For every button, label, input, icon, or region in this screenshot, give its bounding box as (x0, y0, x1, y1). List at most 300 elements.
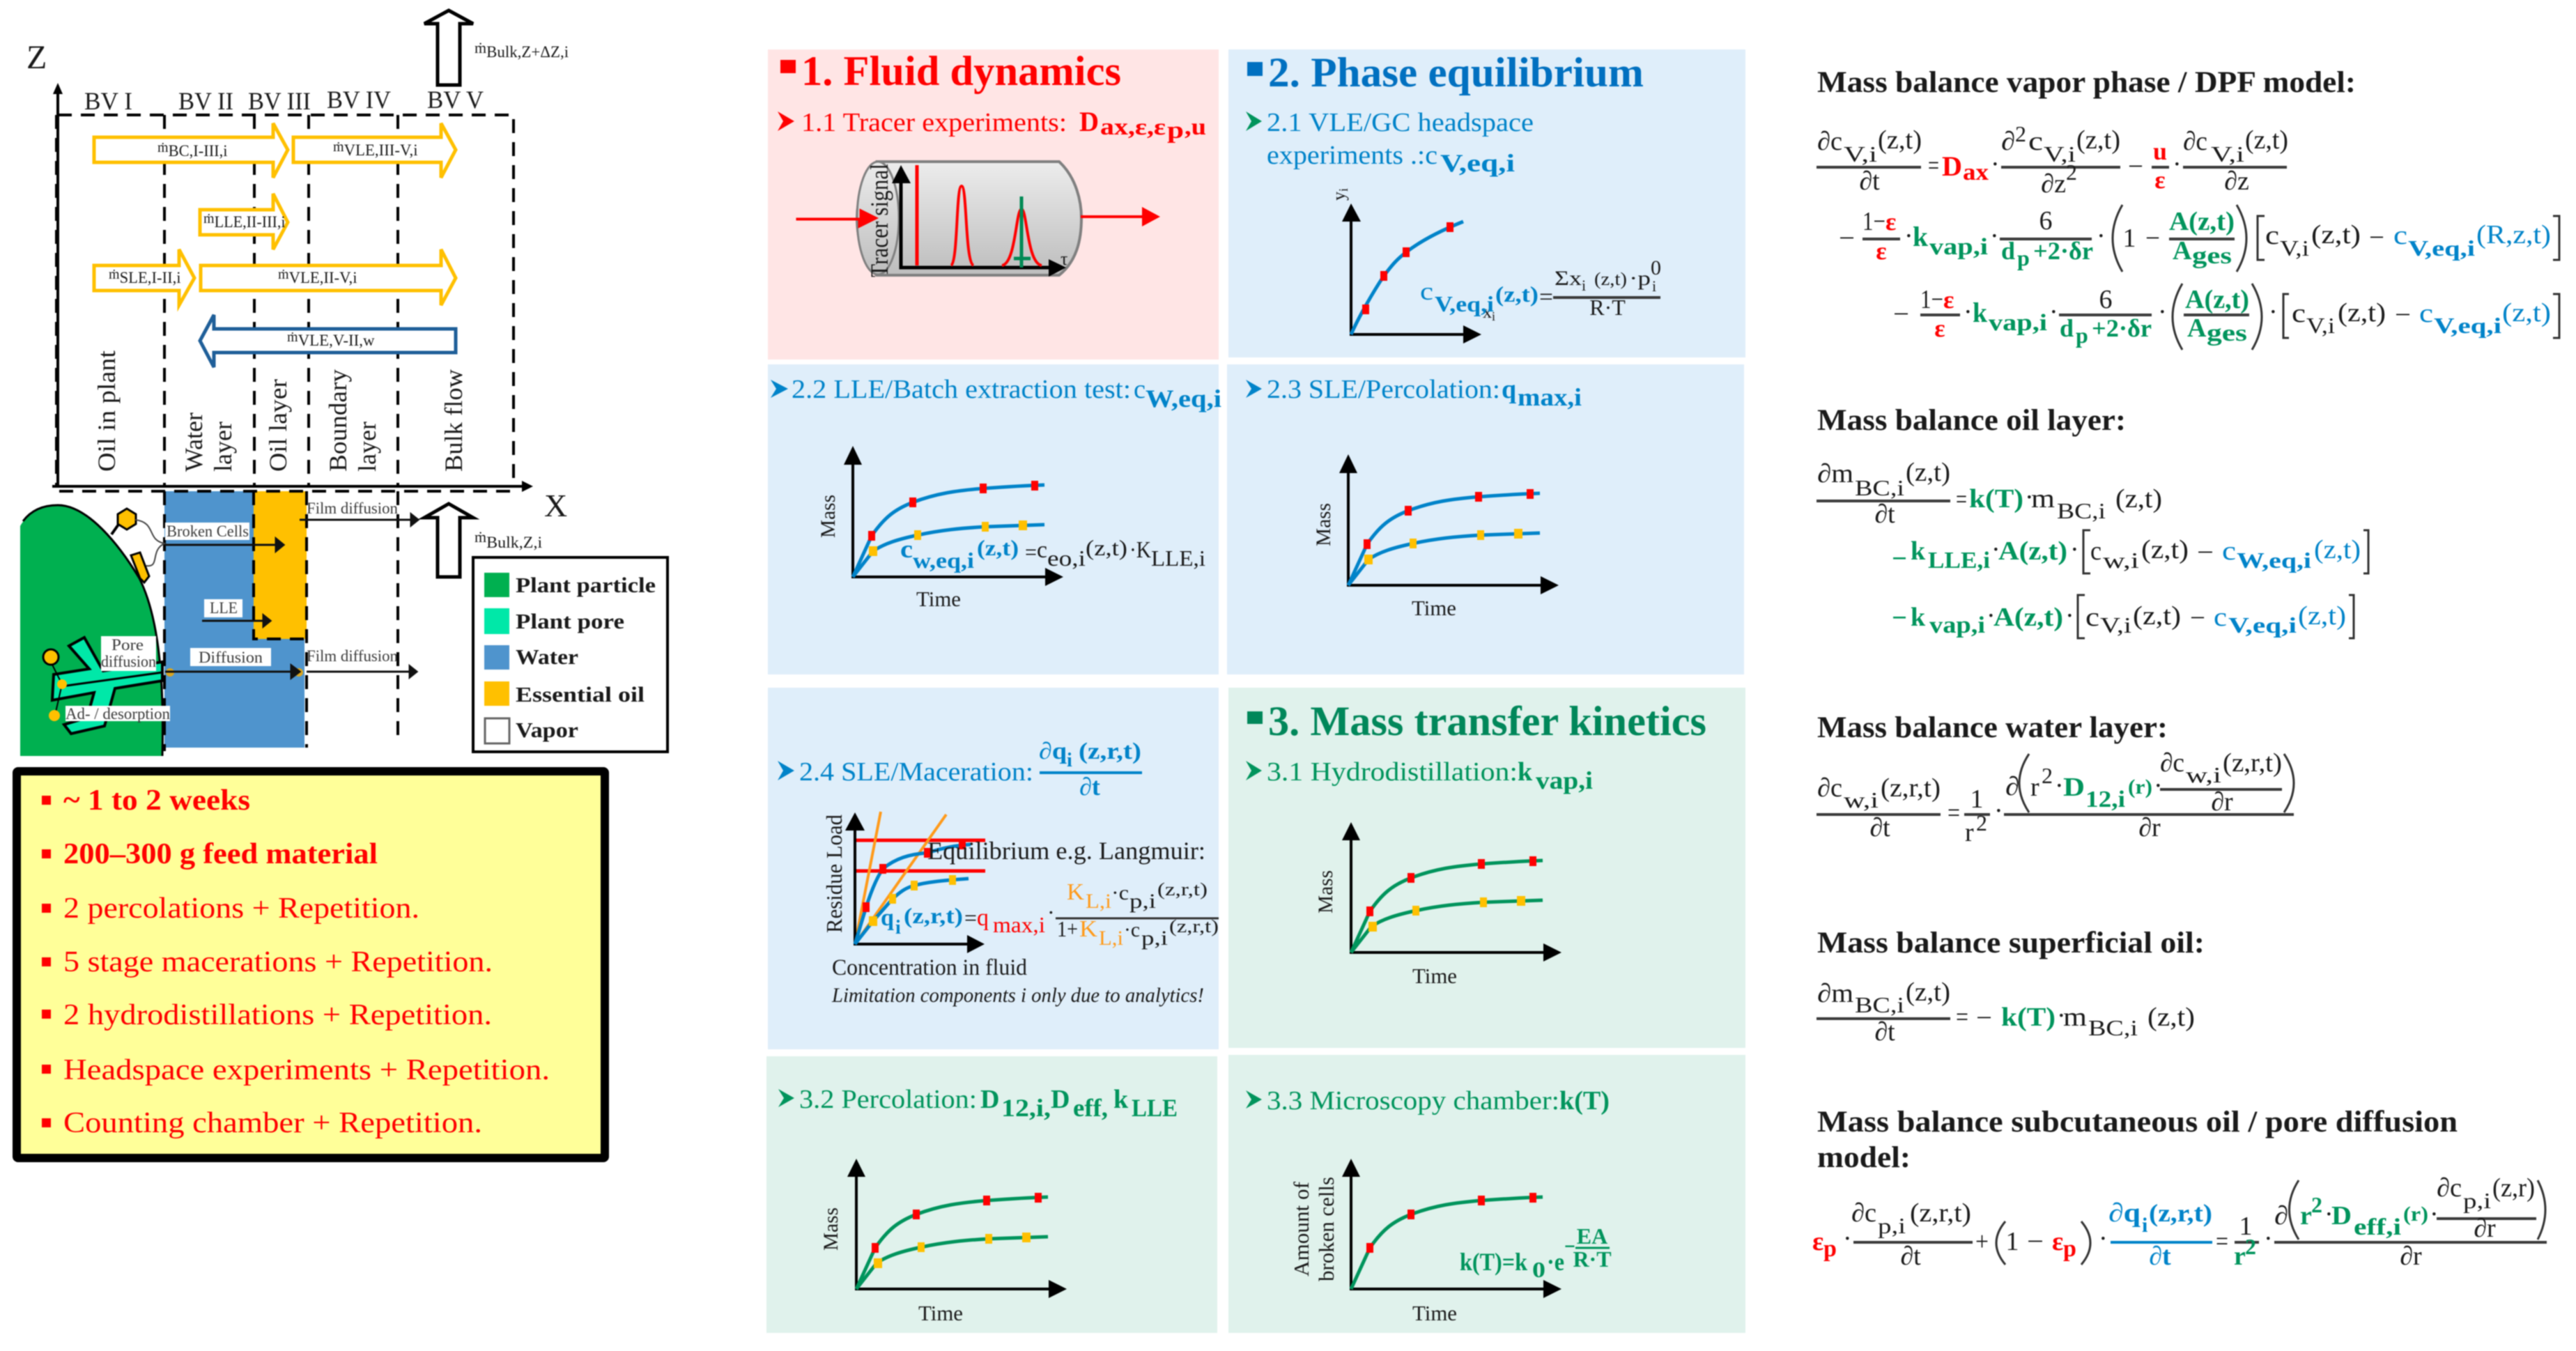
equation: water layer: r (2030, 773, 2039, 802)
chart: residue load isotherm: Residue Load (822, 815, 847, 933)
heading: mass balance superficial oil: Mass balance superficial oil: (1817, 927, 2205, 959)
list items: Counting chamber + Repetition. (63, 1107, 482, 1139)
equation: water layer: w,i (1844, 787, 1879, 812)
equation: oil layer: · (1987, 601, 1996, 631)
equation: subcutaneous oil pore diffusion (1812, 1173, 2547, 1271)
equation: subcutaneous oil pore diffusion: ∂t (2149, 1242, 2171, 1271)
equation: oil layer: (z,t) (2141, 535, 2189, 564)
subheading: SLE percolation: max,i (1518, 383, 1582, 411)
equation: subcutaneous oil pore diffusion: p,i (2463, 1188, 2491, 1213)
equation: vapor phase line 1: D (1942, 150, 1962, 182)
equation: vapor phase line 2: − (2369, 223, 2384, 252)
chart: broken cells over time: broken cells (1314, 1177, 1339, 1281)
formula: vapor equilibrium: V,eq,i (1435, 291, 1494, 316)
equation: superficial oil: BC,i (2088, 1015, 2138, 1040)
formula: vapor equilibrium: (z,t) (1495, 281, 1538, 307)
equation: vapor phase line 2: (z,t) (2311, 220, 2361, 249)
equation: vapor phase line 3: − (2395, 300, 2411, 330)
equation: oil layer: vap,i (1929, 612, 1985, 638)
arrow: tracer inlet (796, 209, 878, 228)
formula: Langmuir isotherm: p,i (1129, 890, 1156, 913)
formula: LLE equilibrium: eo,i (1047, 546, 1086, 571)
formula: Langmuir isotherm: q (977, 905, 989, 931)
equation: oil layer: c (2085, 603, 2099, 632)
subheading: VLE headspace: V,eq,i (1440, 149, 1515, 177)
equation: water layer: 2 (1976, 810, 1987, 835)
equation: subcutaneous oil pore diffusion: p (2063, 1236, 2076, 1262)
equation: superficial oil: (z,t) (2147, 1003, 2195, 1032)
equation: vapor phase line 3: · (1964, 298, 1973, 327)
formula: vapor equilibrium: 0 (1651, 256, 1661, 279)
formula: Langmuir isotherm: L,i (1086, 890, 1111, 913)
panel: 3.2 percolation (766, 1056, 1217, 1333)
formula: LLE equilibrium (900, 535, 1205, 573)
equation: superficial oil: k(T) (2001, 1003, 2056, 1032)
chart: mass over time green: Mass (1314, 870, 1337, 913)
legend: plant pore: Plant pore (516, 609, 624, 633)
arrow: bulk flow out (424, 10, 473, 85)
equation: oil layer: c (2222, 536, 2236, 566)
chart: broken cells over time: Amount of (1289, 1181, 1313, 1276)
equation: water layer: D (2063, 773, 2085, 802)
balance volume headings: BV I (84, 87, 132, 115)
equation: oil layer: (z,t) (2133, 601, 2181, 631)
equation: oil layer: − (2190, 603, 2205, 633)
equation: vapor phase line 3: · (2049, 298, 2058, 327)
equation: subcutaneous oil pore diffusion: ∂ (2274, 1201, 2288, 1230)
arrow: LLE flux: ṁ (203, 211, 215, 226)
equation: vapor phase line 2: k (1913, 221, 1929, 252)
layer boundaries (59, 491, 514, 751)
formula: Langmuir isotherm: K (1067, 879, 1084, 905)
equation: subcutaneous oil pore diffusion: ∂r (2474, 1214, 2496, 1243)
list items: 2 hydrodistillations + Repetition. (63, 999, 492, 1031)
equation: oil layer: (z,t) (1906, 458, 1950, 487)
formula: Langmuir isotherm: (z,r,t) (1157, 879, 1208, 900)
equation: vapor phase line 3: A (2187, 314, 2207, 343)
equation: subcutaneous oil pore diffusion: + (1975, 1227, 1989, 1256)
subheading: tracer experiments: D (1079, 106, 1099, 137)
equation: superficial oil: BC,i (1855, 992, 1904, 1017)
equation: vapor phase line 3: · (2158, 298, 2167, 327)
formula: LLE equilibrium: (z,t) (977, 535, 1019, 560)
label: bulk flow in: Bulk,Z,i (486, 534, 542, 551)
legend: vapor: Vapor (516, 718, 578, 742)
heading: fluid dynamics: 1. Fluid dynamics (801, 48, 1121, 94)
chart: mass over time blue: Mass (817, 495, 840, 538)
arrow: LLE flux (200, 194, 288, 249)
subheading: hydrodistillation (1246, 757, 1593, 794)
label: LLE: LLE (210, 599, 238, 617)
water layer (164, 491, 304, 748)
arrow: water vapor flux (200, 315, 456, 367)
list items: ~ 1 to 2 weeks (63, 785, 250, 817)
subheading: SLE maceration: (z,r,t) (1079, 739, 1141, 764)
equation: superficial oil: = (1956, 1003, 1968, 1032)
equation: vapor phase line 3: 6 (2099, 285, 2113, 314)
equation: oil layer: · (2070, 535, 2079, 564)
formula: vapor equilibrium: c (1420, 277, 1433, 305)
equation: subcutaneous oil pore diffusion: p,i (1878, 1213, 1906, 1238)
equation: vapor phase line 1: ∂c (1817, 127, 1842, 156)
label: bulk flow out: Bulk,Z+ΔZ,i (486, 43, 569, 61)
formula: Langmuir isotherm: ·c (1124, 918, 1140, 941)
equation: subcutaneous oil pore diffusion: ∂c (1851, 1198, 1876, 1228)
equation: oil layer: − (2197, 538, 2214, 567)
heading: phase equilibrium: 2. Phase equilibrium (1268, 49, 1644, 95)
equation: vapor phase line 1 (1817, 121, 2288, 199)
equation: subcutaneous oil pore diffusion: ε (2052, 1227, 2063, 1256)
formula: vapor equilibrium: = (1539, 284, 1553, 310)
chart: broken cells over time (1289, 1159, 1561, 1325)
panel: experimental effort summary (17, 771, 605, 1158)
equation: vapor phase line 2: 1− (1862, 207, 1885, 236)
balance volume grid (56, 115, 514, 486)
superficial oil droplets (111, 509, 164, 582)
equation: vapor phase line 2: ges (2192, 243, 2232, 269)
icon: tracer column chart: Tracer signal (865, 164, 893, 277)
arrow: superficial oil flux: ṁ (157, 140, 169, 155)
equation: vapor phase line 1: ax (1963, 160, 1989, 185)
equation: subcutaneous oil pore diffusion: · (2099, 1224, 2108, 1253)
heading: mass balance oil layer: Mass balance oil layer: (1817, 404, 2126, 437)
arrow: water vapor flux: VLE,V-II,w (298, 332, 375, 349)
equation: oil layer: k (1911, 536, 1926, 566)
equation: oil layer: · (2065, 601, 2074, 631)
vertical region labels: Boundary (324, 369, 352, 472)
panel: 3.3 microscopy chamber (1228, 1055, 1745, 1333)
legend: plant pore (484, 608, 624, 634)
subheading: LLE batch extraction (771, 375, 1221, 412)
equation: vapor phase line 3 (1893, 284, 2559, 350)
equation: vapor phase line 1: ∂c (2183, 127, 2207, 156)
equation: subcutaneous oil pore diffusion: (z,r) (2492, 1173, 2535, 1203)
equation: water layer: 2 (2042, 763, 2053, 788)
balance volume headings (84, 86, 484, 115)
equation: water layer: (z,r,t) (1881, 773, 1941, 803)
panel: 2.4 SLE maceration (768, 688, 1219, 1049)
equation: subcutaneous oil pore diffusion: 2 (2245, 1234, 2256, 1259)
equation: vapor phase line 3: (z,t) (2338, 298, 2386, 327)
equation: vapor phase line 1: ∂z (2041, 169, 2066, 199)
equation: water layer: ∂t (1869, 813, 1890, 842)
subheading: VLE headspace (1246, 108, 1534, 177)
panel: 3 mass transfer kinetics (1228, 688, 1745, 1048)
plant particle outline (23, 505, 162, 756)
equation: vapor phase line 3: V,eq,i (2434, 313, 2501, 338)
equation: vapor phase line 3: ε (1943, 286, 1954, 314)
equation: vapor phase line 3: c (2419, 299, 2433, 328)
equation: vapor phase line 2: d (2001, 237, 2015, 265)
equation: superficial oil (1817, 978, 2195, 1047)
subheading: percolation: D (1051, 1085, 1070, 1114)
equation: vapor phase line 1: V,i (2211, 141, 2244, 167)
equation: oil layer: k(T) (1969, 484, 2023, 514)
subheading: tracer experiments: 1.1 Tracer experiments: (801, 108, 1067, 137)
equation: oil layer: BC,i (2057, 498, 2106, 523)
formula: Arrhenius: R·T (1573, 1246, 1612, 1272)
label: pore diffusion: Pore (111, 636, 144, 654)
equation: water layer: 12,i (2085, 787, 2125, 812)
vertical region labels: Oil in plant (93, 350, 121, 472)
chart: broken cells over time: Time (1412, 1301, 1457, 1325)
panel: 2.3 SLE percolation (1227, 364, 1744, 674)
subheading: percolation (778, 1085, 1178, 1122)
formula: Langmuir isotherm: K (1079, 916, 1097, 942)
equation: vapor phase line 2: 1 (2122, 224, 2136, 253)
subheading: percolation: eff, (1073, 1094, 1108, 1122)
chart: mass over time green (1314, 822, 1561, 988)
subheading: SLE maceration: i (1067, 750, 1072, 771)
subheading: SLE maceration: ∂q (1039, 739, 1067, 764)
equation: subcutaneous oil pore diffusion: D (2331, 1201, 2352, 1230)
equation: superficial oil: (z,t) (1906, 978, 1950, 1007)
heading: mass balance subcutaneous oil: model: (1817, 1141, 1911, 1174)
equation: vapor phase line 2: c (2393, 221, 2407, 250)
formula: Langmuir isotherm: = (964, 905, 977, 930)
equation: vapor phase line 3: 1− (1920, 285, 1943, 314)
equation: subcutaneous oil pore diffusion: ∂c (2437, 1173, 2462, 1203)
subheading: LLE batch extraction: 2.2 LLE/Batch extraction test: (792, 375, 1131, 404)
pore arrow and droplets (43, 649, 303, 721)
equation: superficial oil: · (2057, 1001, 2066, 1030)
equation: oil layer: (z,t) (2115, 484, 2162, 514)
formula: vapor equilibrium: Σx (1555, 267, 1582, 290)
legend: water (484, 644, 578, 670)
equation: water layer: ∂r (2138, 813, 2161, 842)
equation: vapor phase line 3: ges (2207, 321, 2247, 346)
equation: vapor phase line 3: +2·δr (2092, 314, 2152, 342)
chart: mass over time blue (1312, 454, 1559, 620)
subheading: tracer experiments (778, 106, 1206, 144)
equation: subcutaneous oil pore diffusion: = (2216, 1227, 2228, 1256)
equation: vapor phase line 2: · (2097, 222, 2106, 251)
legend: essential oil: Essential oil (516, 682, 645, 707)
formula: vapor equilibrium: i (1652, 277, 1656, 295)
list items: 2 percolations + Repetition. (63, 893, 419, 925)
formula: LLE equilibrium: w,eq,i (913, 548, 974, 573)
equation: water layer: ∂ (2005, 772, 2019, 801)
legend: essential oil (484, 681, 645, 707)
panel: 2 phase equilibrium (1228, 49, 1745, 357)
chart: residue load isotherm: Concentration in fluid (832, 955, 1027, 980)
list items: 5 stage macerations + Repetition. (63, 946, 493, 978)
equation: subcutaneous oil pore diffusion: (z,r,t) (1910, 1198, 1971, 1228)
equation: water layer (1817, 748, 2294, 847)
label: diffusion: Diffusion (199, 649, 263, 666)
subheading: VLE headspace: 2.1 VLE/GC headspace (1267, 108, 1534, 137)
equation: oil layer: ∂m (1817, 459, 1853, 488)
equation: subcutaneous oil pore diffusion: · (1843, 1224, 1852, 1253)
label: Langmuir equilibrium: Equilibrium e.g. Langmuir: (927, 837, 1205, 865)
equation: vapor phase line 3: − (1893, 300, 1909, 329)
plant particle (20, 505, 162, 756)
arrow: SLE flux: ṁ (109, 267, 120, 282)
equation: oil layer: c (2214, 603, 2227, 632)
equation: water layer: w,i (2186, 762, 2221, 787)
label: film diffusion lower: Film diffusion (307, 647, 398, 665)
formula: LLE equilibrium: c (1037, 537, 1047, 563)
subheading: hydrodistillation: 3.1 Hydrodistillation: (1267, 757, 1518, 787)
formula: Langmuir isotherm (881, 879, 1219, 950)
equation: water layer: ∂c (1817, 773, 1842, 803)
equation: oil layer: W,eq,i (2237, 548, 2311, 573)
equation: vapor phase line 1: ε (2154, 166, 2166, 194)
arrow: vapor flux III-V (293, 123, 456, 178)
arrow: tracer outlet (1081, 207, 1160, 226)
equation: vapor phase line 2: A(z,t) (2169, 207, 2235, 236)
equation: water layer: ∂r (2211, 787, 2233, 817)
chart: VLE curve (1329, 188, 1495, 343)
panel: 2.2 LLE batch extraction (768, 364, 1221, 674)
legend: plant particle: Plant particle (516, 573, 656, 597)
equation: vapor phase line 2: − (1839, 224, 1855, 253)
formula: Langmuir isotherm: (z,r,t) (1169, 916, 1219, 936)
equation: subcutaneous oil pore diffusion: − (2027, 1227, 2044, 1256)
equation: vapor phase line 3: V,i (2306, 313, 2335, 338)
equation: superficial oil: − (1976, 1003, 1992, 1033)
icon: tracer column chart: τ (1061, 249, 1067, 269)
oil layer (254, 491, 307, 639)
label: bulk flow in: ṁ (475, 528, 486, 546)
chart: VLE curve: i (1492, 309, 1495, 323)
formula: Arrhenius (1460, 1223, 1612, 1282)
formula: LLE equilibrium: ·K (1129, 537, 1151, 563)
equation: subcutaneous oil pore diffusion: (r) (2403, 1203, 2428, 1226)
equation: oil layer: c (2090, 536, 2101, 566)
equation: vapor phase line 2: p (2017, 245, 2030, 270)
equation: vapor phase line 1: ∂t (1859, 167, 1880, 196)
equation: vapor phase line 1: (z,t) (2076, 125, 2120, 155)
formula: Arrhenius: k(T)=k (1460, 1248, 1527, 1276)
axis label Z: Z (26, 39, 47, 76)
chart: VLE curve: y (1329, 192, 1349, 201)
subheading: percolation: LLE (1132, 1094, 1178, 1122)
label: pore diffusion: diffusion (101, 653, 156, 670)
formula: vapor equilibrium: R·T (1589, 295, 1626, 320)
subheading: LLE batch extraction: c (1134, 375, 1146, 404)
equation: vapor phase line 3: p (2076, 323, 2088, 348)
equation: oil layer: − (1892, 544, 1907, 573)
subheading: SLE percolation (1246, 375, 1582, 411)
equation: vapor phase line 1: = (1928, 151, 1939, 180)
arrow: vapor flux III-V: VLE,III-V,i (344, 141, 418, 159)
subheading: SLE percolation: 2.3 SLE/Percolation: (1267, 375, 1500, 404)
equation: vapor phase line 3: d (2060, 314, 2074, 342)
formula: vapor equilibrium (1420, 256, 1661, 320)
formula: Arrhenius: − (1564, 1234, 1575, 1260)
subheading: LLE batch extraction: W,eq,i (1146, 385, 1221, 412)
heading: mass balance vapor phase: Mass balance vapor phase / DPF model: (1817, 66, 2356, 99)
equation: superficial oil: ∂m (1817, 979, 1853, 1008)
equation: vapor phase line 3: ε (1934, 314, 1945, 342)
equation: oil layer: k (1911, 603, 1926, 632)
equation: subcutaneous oil pore diffusion: · (2264, 1224, 2273, 1253)
equation: oil layer: BC,i (1855, 475, 1904, 500)
equation: vapor phase line 2: · (1904, 222, 1913, 251)
equation: vapor phase line 2: c (2265, 221, 2279, 250)
formula: Langmuir isotherm: (z,r,t) (904, 903, 963, 928)
subheading: percolation: D (980, 1085, 999, 1114)
balance volume headings: BV V (427, 86, 484, 114)
chart: residue load isotherm (822, 812, 1027, 980)
equation: oil layer: A(z,t) (1993, 603, 2063, 632)
equation: vapor phase line 3: vap,i (1989, 310, 2047, 336)
label: pore diffusion (101, 636, 156, 671)
arrow: vapor flux II-V (201, 249, 456, 305)
vertical region labels: Oil layer (264, 379, 292, 472)
chart: VLE curve: i (1336, 188, 1350, 192)
formula: Arrhenius: 0 (1532, 1257, 1545, 1282)
equation: oil layer: A(z,t) (1998, 536, 2067, 566)
equation: subcutaneous oil pore diffusion: · (2430, 1200, 2439, 1229)
chart: mass over time blue: Time (916, 587, 961, 611)
equation: water layer: 1 (1970, 785, 1983, 814)
subheading: SLE maceration (778, 739, 1142, 801)
chart: mass over time blue: Time (1412, 596, 1456, 620)
equation: vapor phase line 3: c (2292, 299, 2306, 328)
note: limitation: Limitation components i only due to analytics! (831, 984, 1204, 1007)
equation: vapor phase line 1: V,i (2044, 141, 2076, 167)
vertical region labels (93, 350, 468, 472)
formula: LLE equilibrium: = (1025, 539, 1037, 564)
equation: oil layer: − (1892, 603, 1907, 633)
arrow: water vapor flux: ṁ (287, 330, 298, 345)
vertical region labels: Bulk flow (440, 369, 468, 472)
legend (473, 557, 668, 752)
formula: Langmuir isotherm: L,i (1099, 927, 1123, 950)
vertical region labels: layer (209, 422, 237, 472)
equation: subcutaneous oil pore diffusion: ∂q (2108, 1198, 2141, 1228)
equation: vapor phase line 2: · (1990, 222, 1999, 251)
axes (52, 89, 526, 486)
equation: subcutaneous oil pore diffusion: ε (1812, 1227, 1823, 1256)
subheading: tracer experiments: p (1167, 118, 1184, 144)
panel: balance volume diagram (20, 10, 668, 756)
subheading: percolation: 12,i, (1001, 1094, 1051, 1122)
equation: subcutaneous oil pore diffusion: p (1823, 1236, 1837, 1262)
equation: vapor phase line 1: c (2028, 127, 2043, 156)
equation: vapor phase line 2: (R,z,t) (2476, 220, 2551, 249)
equation: vapor phase line 1: V,i (1844, 141, 1877, 167)
equation: superficial oil: m (2063, 1003, 2087, 1032)
equation: subcutaneous oil pore diffusion: 1 (2239, 1212, 2252, 1241)
equation: subcutaneous oil pore diffusion: · (2324, 1200, 2334, 1229)
icon: tracer column chart (857, 162, 1081, 277)
equation: water layer: (r) (2128, 775, 2152, 798)
subheading: microscopy chamber: k(T) (1559, 1086, 1610, 1115)
equation: oil layer: · (1991, 535, 2000, 564)
equation: vapor phase line 2: ε (1885, 208, 1896, 236)
arrow: vapor flux II-V: ṁ (278, 267, 289, 282)
equation: oil layer: (z,t) (2314, 535, 2361, 564)
formula: Langmuir isotherm: ·c (1111, 881, 1129, 904)
equation: oil layer: (z,t) (2298, 601, 2346, 631)
equation: water layer: (z,r,t) (2223, 748, 2282, 778)
equation: vapor phase line 3: k (1973, 297, 1988, 328)
subheading: percolation: k (1113, 1085, 1129, 1114)
arrow: bulk flow in (424, 504, 473, 577)
equation: vapor phase line 1: · (1991, 150, 2000, 179)
equation: vapor phase line 2: 6 (2039, 206, 2053, 236)
arrow: SLE flux (94, 249, 194, 305)
chart: mass over time blue (817, 446, 1063, 611)
formula: Langmuir isotherm: i (895, 917, 901, 939)
equation: water layer: ∂c (2160, 748, 2184, 778)
arrow: SLE flux: SLE,I-II,i (120, 269, 181, 286)
formula: Arrhenius: EA (1577, 1223, 1607, 1249)
equation: vapor phase line 1: 2 (2015, 121, 2026, 146)
